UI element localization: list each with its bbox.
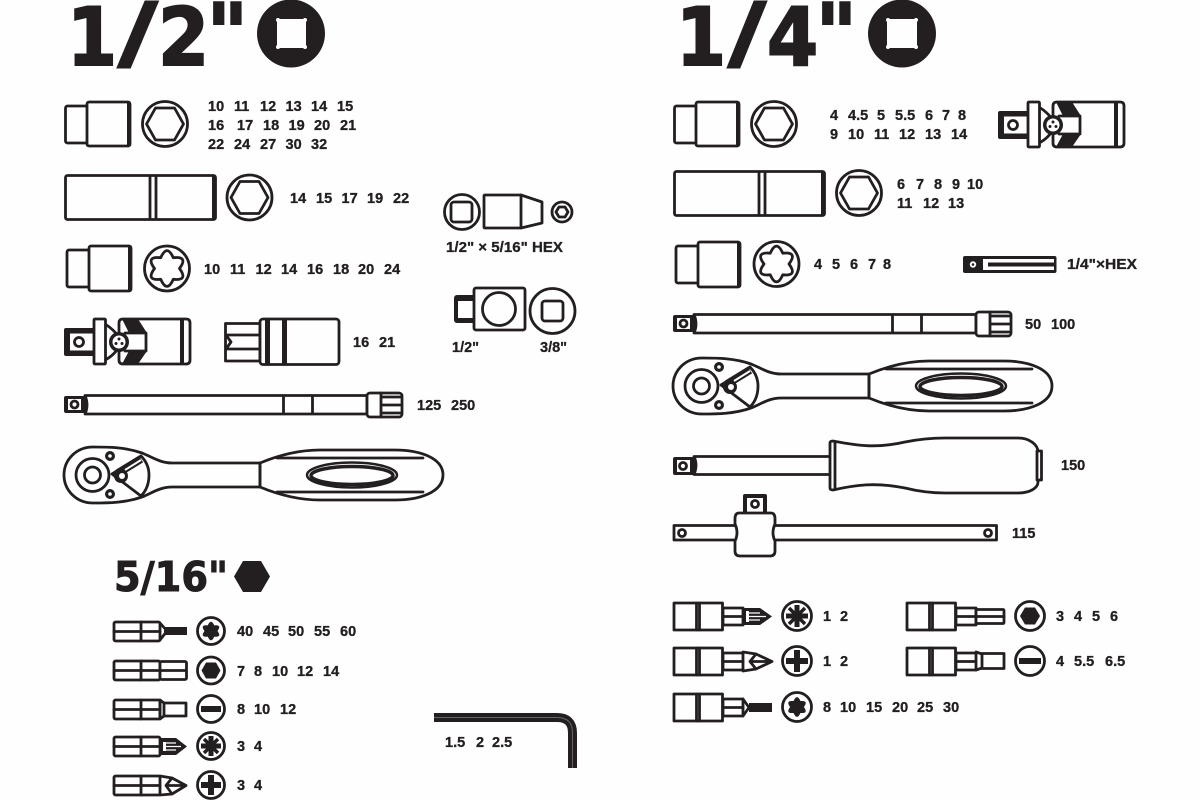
row: torx bits 5/16 [114,618,356,644]
row: sliding T-bar 115: 115 [1012,526,1035,542]
row: standard sockets 1/4: 6 [925,108,933,124]
row: extension bars 1/2 [64,393,475,417]
row: phillips bits 1/4: 2 [840,654,848,670]
row: torx sockets 1/4: 5 [832,257,840,273]
row: extension bars 1/4 [673,312,1075,336]
row: phillips bits 5/16: 4 [254,778,262,794]
row: standard sockets 1/2 [66,99,356,153]
row: standard sockets 1/2: 16 [208,118,224,134]
row: slot bits 1/4: 5.5 [1074,654,1094,670]
row: hex bits 5/16: 14 [323,664,339,680]
row: hex bits 1/4 [907,602,1118,630]
row: standard sockets 1/4: 8 [958,108,966,124]
row: standard sockets 1/2: 30 [286,137,302,153]
row: torx sockets 1/2: 18 [333,262,349,278]
row: pozidriv bits 5/16: 4 [254,739,262,755]
row: standard sockets 1/4: 4 [830,108,838,124]
icon: universal joint 1/4 [998,102,1124,147]
row: torx sockets 1/2: 12 [256,262,272,278]
row: torx bits 1/4: 8 [823,700,831,716]
row: torx sockets 1/2: 14 [281,262,297,278]
row: torx bits 1/4: 30 [943,700,959,716]
row: hex bit adapter 1/4 [963,256,1137,273]
row: hex bits 5/16: 8 [254,664,262,680]
row: standard sockets 1/2: 10 [208,99,224,115]
row: standard sockets 1/2: 24 [234,137,250,153]
row: torx bits 1/4 [674,692,959,722]
row: hex adapter socket 16 21: 16 [353,335,369,351]
row: deep sockets 1/4: 8 [934,177,942,193]
row: standard sockets 1/4 [674,102,967,146]
row: hex bits 1/4: 4 [1074,609,1082,625]
adapter: 1/2 x 5/16 hex [444,194,572,256]
row: deep sockets 1/4: 11 [897,196,912,212]
row: standard sockets 1/2: 11 [234,99,249,115]
row: extension bars 1/4: 100 [1051,317,1075,333]
row: standard sockets 1/2: 13 [286,99,302,115]
row: standard sockets 1/4: 14 [951,127,967,143]
row: extension bars 1/4: 50 [1025,317,1041,333]
row: extension bars 1/2: 125 [417,398,441,414]
row: standard sockets 1/4: 5 [877,108,885,124]
row: phillips bits 1/4 [674,646,848,676]
row: deep sockets 1/2: 15 [316,191,332,207]
row: standard sockets 1/2: 19 [288,118,305,134]
row: hex adapter socket 16 21: 21 [379,335,395,351]
row: torx bits 1/4: 10 [840,700,856,716]
row: torx bits 1/4: 15 [866,700,882,716]
row: hex bits 5/16: 10 [272,664,288,680]
row: spinner handle 150: 150 [1061,458,1085,474]
row: torx sockets 1/4: 8 [883,257,891,273]
icon: hex key with sizes: 1.5 [445,735,465,751]
row: deep sockets 1/4: 7 [916,177,924,193]
row: pozidriv bits 5/16 [114,732,262,760]
row: deep sockets 1/2: 17 [342,191,358,207]
row: pozidriv bits 1/4: 1 [823,609,831,625]
row: slot bits 5/16: 10 [254,702,270,718]
row: torx sockets 1/4: 6 [850,257,858,273]
row: slot bits 1/4: 4 [1056,654,1064,670]
icon: hex key with sizes [434,718,572,768]
adapter: 1/2 x 5/16 hex: 1/2" × 5/16" HEX [446,240,563,256]
row: pozidriv bits 1/4 [674,602,848,630]
row: torx sockets 1/2: 11 [230,262,245,278]
adapter: 1/2 to 3/8: 1/2" [452,340,479,356]
row: standard sockets 1/2: 18 [263,118,279,134]
row: torx bits 5/16: 60 [340,624,356,640]
adapter: 1/2 to 3/8 [452,288,575,356]
row: hex bits 5/16: 7 [237,664,245,680]
row: torx sockets 1/2: 20 [358,262,374,278]
row: standard sockets 1/4: 13 [925,127,941,143]
row: standard sockets 1/2: 27 [260,137,276,153]
row: standard sockets 1/2: 12 [260,99,276,115]
row: extension bars 1/2: 250 [451,398,475,414]
row: torx sockets 1/2 [67,246,400,291]
row: standard sockets 1/2: 14 [311,99,327,115]
row: slot bits 5/16: 8 [237,702,245,718]
row: deep sockets 1/4: 6 [897,177,905,193]
row: torx bits 1/4: 25 [917,700,933,716]
row: deep sockets 1/2: 19 [367,191,383,207]
row: deep sockets 1/4: 13 [948,196,964,212]
row: deep sockets 1/2: 14 [290,191,306,207]
row: hex bits 5/16 [114,657,339,684]
row: hex bit adapter 1/4: 1/4"×HEX [1067,257,1137,273]
row: hex bits 1/4: 6 [1110,609,1118,625]
row: torx bits 5/16: 50 [288,624,304,640]
row: deep sockets 1/4: 12 [923,196,939,212]
row: torx sockets 1/2: 24 [384,262,400,278]
row: hex bits 1/4: 5 [1092,609,1100,625]
row: torx sockets 1/4: 7 [868,257,876,273]
row: spinner handle 150 [673,438,1085,493]
row: standard sockets 1/4: 9 [830,127,838,143]
row: torx sockets 1/4 [676,242,891,287]
row: slot bits 5/16: 12 [280,702,296,718]
row: torx bits 5/16: 55 [314,624,330,640]
icon: ratchet 1/4 [673,358,1052,414]
row: sliding T-bar 115 [674,494,1035,556]
row: standard sockets 1/2: 32 [311,137,327,153]
adapter: 1/2 to 3/8: 3/8" [540,340,567,356]
row: torx bits 5/16: 45 [263,624,279,640]
heading: 5/16 inch: 5/16" [114,553,228,601]
row: standard sockets 1/4: 12 [899,127,915,143]
row: deep sockets 1/2: 22 [393,191,409,207]
row: standard sockets 1/4: 7 [942,108,950,124]
row: torx bits 1/4: 20 [892,700,908,716]
row: standard sockets 1/4: 10 [848,127,864,143]
row: standard sockets 1/2: 17 [237,118,253,134]
row: phillips bits 5/16 [114,772,262,798]
row: hex adapter socket 16 21 [226,319,395,364]
icon: ratchet 1/2 [64,447,443,503]
row: standard sockets 1/2: 21 [340,118,356,134]
icon: hex key with sizes: 2.5 [492,735,512,751]
row: pozidriv bits 1/4: 2 [840,609,848,625]
row: slot bits 1/4 [907,646,1125,676]
row: torx sockets 1/4: 4 [814,257,822,273]
row: pozidriv bits 5/16: 3 [237,739,245,755]
row: standard sockets 1/4: 11 [874,127,889,143]
row: slot bits 5/16 [114,696,296,722]
heading: 1/4 inch [676,0,936,85]
heading: 1/2 inch [67,0,325,85]
row: hex bits 5/16: 12 [297,664,313,680]
row: standard sockets 1/2: 15 [337,99,353,115]
row: deep sockets 1/4 [674,170,983,216]
row: deep sockets 1/2 [66,175,409,220]
row: phillips bits 1/4: 1 [823,654,831,670]
row: torx sockets 1/2: 10 [204,262,220,278]
row: standard sockets 1/2: 20 [314,118,330,134]
row: torx sockets 1/2: 16 [307,262,323,278]
row: deep sockets 1/4: 10 [967,177,983,193]
row: standard sockets 1/2: 22 [208,137,224,153]
row: torx bits 5/16: 40 [237,624,253,640]
row: phillips bits 5/16: 3 [237,778,245,794]
row: deep sockets 1/4: 9 [952,177,960,193]
icon: hex key with sizes: 2 [476,735,484,751]
row: slot bits 1/4: 6.5 [1105,654,1125,670]
row: standard sockets 1/4: 5.5 [895,108,915,124]
icon: universal joint 1/2 [64,319,190,364]
row: standard sockets 1/4: 4.5 [848,108,868,124]
row: hex bits 1/4: 3 [1056,609,1064,625]
